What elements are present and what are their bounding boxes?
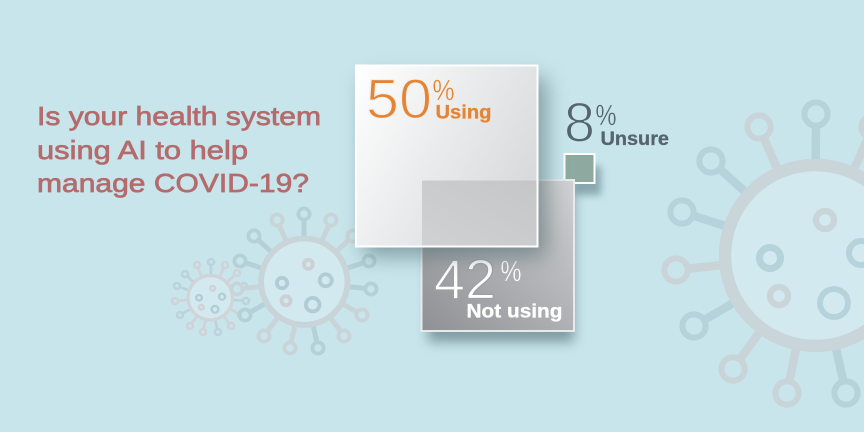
label: 42% not using xyxy=(434,247,562,323)
label: 50% using xyxy=(366,67,492,130)
title: using AI to help xyxy=(37,135,248,165)
icon: small virus xyxy=(172,259,249,335)
label: 8% unsure: 8 xyxy=(564,90,595,154)
icon: large virus right xyxy=(664,102,864,405)
label: 8% unsure: % xyxy=(596,100,616,132)
icon: medium virus xyxy=(231,208,377,354)
label: 50% using: Using xyxy=(436,102,492,123)
label: 8% unsure xyxy=(564,90,669,154)
title: Is your health system xyxy=(37,101,321,131)
card: 8 percent unsure xyxy=(564,90,669,195)
label: 50% using: % xyxy=(432,75,454,107)
label: 42% not using: 42 xyxy=(434,247,496,310)
label: 50% using: 50 xyxy=(366,67,432,130)
card: 50 percent using xyxy=(356,66,546,256)
title: manage COVID-19? xyxy=(37,168,309,198)
label: 42% not using: % xyxy=(500,256,522,288)
card: 42 percent not using xyxy=(422,180,574,342)
label: 8% unsure: Unsure xyxy=(600,129,669,150)
card overlap xyxy=(422,180,536,246)
label: 42% not using: Not using xyxy=(466,302,562,323)
